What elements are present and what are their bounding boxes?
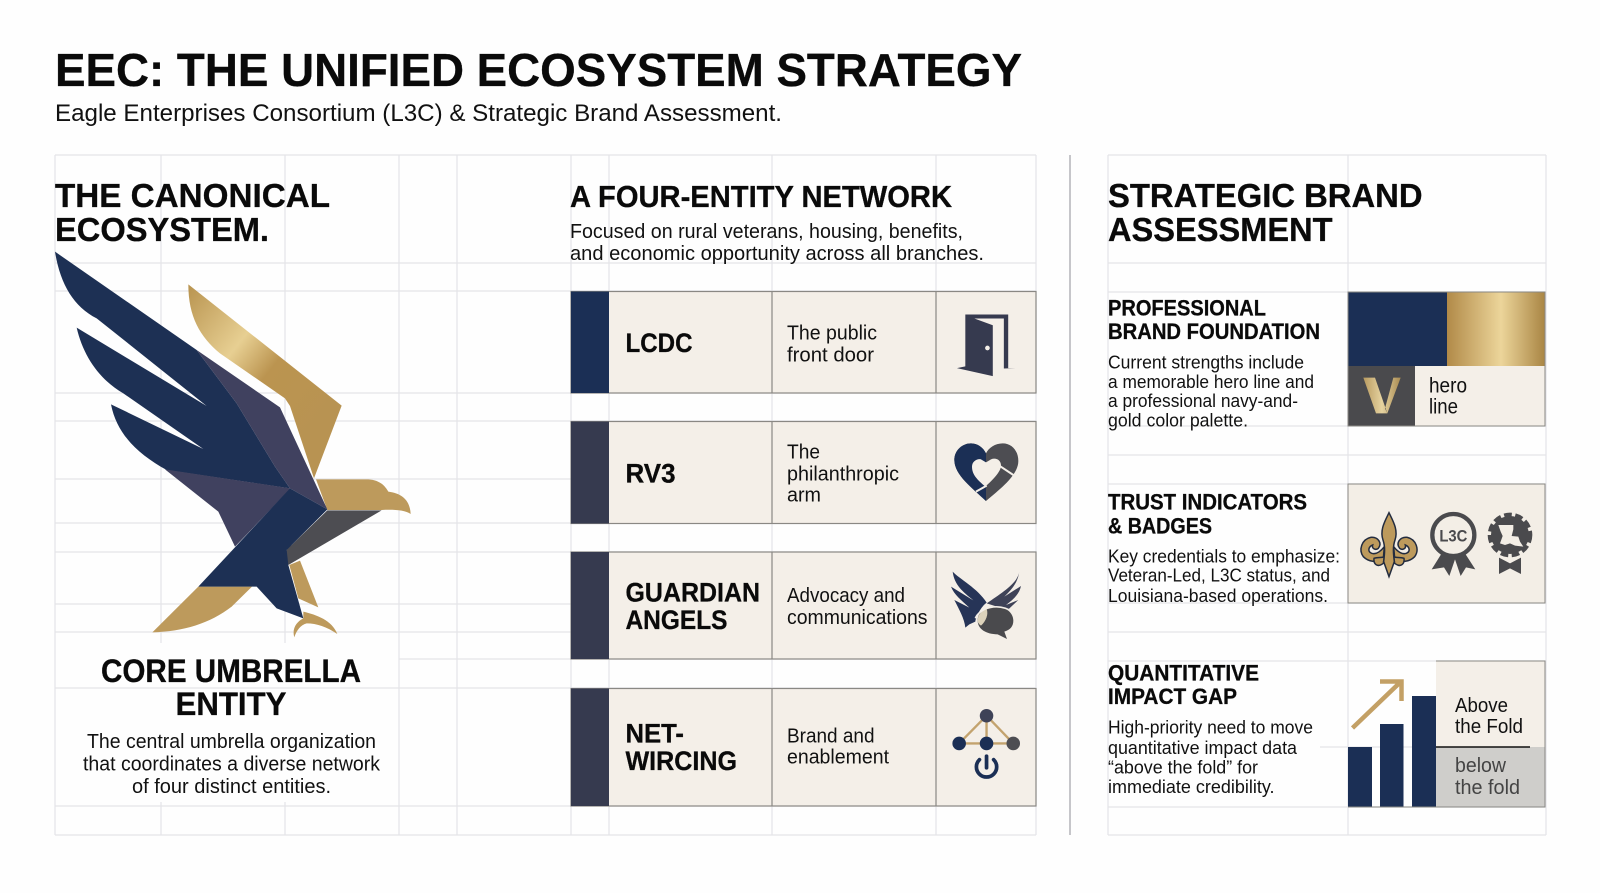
row: RV3: arm bbox=[787, 484, 821, 506]
icon: open door bbox=[957, 315, 1016, 376]
row: LCDC: LCDC bbox=[626, 328, 692, 358]
icon: fleur-de-lis bbox=[1361, 513, 1417, 577]
section: quantitative impact gap: QUANTITATIVE bbox=[1108, 661, 1259, 686]
icon: network and power bbox=[952, 709, 1020, 777]
panel: canonical ecosystem bbox=[55, 177, 411, 798]
text: core description: of four distinct entities. bbox=[132, 776, 331, 798]
section: trust indicators and badges: TRUST INDICATORS bbox=[1108, 490, 1307, 514]
icon: eagle logo bbox=[55, 252, 411, 637]
section: professional brand foundation: a professional navy-and- bbox=[1108, 391, 1298, 411]
graphic: brand palette swatches: line bbox=[1429, 396, 1458, 418]
heading: core umbrella entity bbox=[101, 653, 361, 722]
section: quantitative impact gap: High-priority need to move bbox=[1108, 718, 1313, 738]
section: trust indicators and badges bbox=[1108, 484, 1545, 606]
title bbox=[55, 44, 1022, 127]
section: professional brand foundation: Current strengths include bbox=[1108, 352, 1304, 372]
row: Net-Wircing: WIRCING bbox=[626, 746, 737, 776]
section: trust indicators and badges: Veteran-Led, L3C status, and bbox=[1108, 566, 1330, 586]
row: Net-Wircing: NET- bbox=[626, 718, 684, 748]
section: quantitative impact gap: “above the fold” for bbox=[1108, 758, 1258, 778]
heading: core umbrella entity: CORE UMBRELLA bbox=[101, 653, 361, 689]
section: trust indicators and badges: & BADGES bbox=[1108, 514, 1212, 538]
graphic: brand palette swatches bbox=[1348, 292, 1545, 426]
heading: four-entity network: A FOUR-ENTITY NETWORK bbox=[570, 179, 953, 214]
text: network description bbox=[570, 221, 984, 265]
panel: strategic brand assessment bbox=[1108, 177, 1545, 807]
callout: above and below the fold bbox=[1348, 661, 1545, 807]
text: core description: that coordinates a diverse network bbox=[83, 754, 381, 776]
row: Guardian Angels: Advocacy and bbox=[787, 585, 905, 607]
section: quantitative impact gap: quantitative impact data bbox=[1108, 738, 1298, 758]
heading: strategic brand assessment: ASSESSMENT bbox=[1108, 211, 1332, 248]
text: network description: and economic opportunity across all branches. bbox=[570, 243, 984, 265]
section: quantitative impact gap bbox=[1108, 661, 1545, 807]
section: professional brand foundation: a memorable hero line and bbox=[1108, 372, 1314, 392]
heading: the canonical ecosystem: ECOSYSTEM. bbox=[55, 211, 269, 248]
section: quantitative impact gap: IMPACT GAP bbox=[1108, 684, 1237, 709]
graphic: badges box bbox=[1348, 484, 1545, 603]
icon: wings and speech bubble bbox=[951, 572, 1021, 639]
heading: strategic brand assessment bbox=[1108, 177, 1422, 248]
icon: heart bbox=[954, 443, 1018, 501]
row: Guardian Angels: communications bbox=[787, 607, 928, 629]
text: network description: Focused on rural veterans, housing, benefits, bbox=[570, 221, 963, 243]
heading: the canonical ecosystem: THE CANONICAL bbox=[55, 177, 330, 214]
callout: above and below the fold: the fold bbox=[1455, 776, 1520, 799]
icon: L3C ribbon bbox=[1432, 514, 1475, 576]
row: Net-Wircing: Brand and bbox=[787, 726, 874, 748]
callout: above and below the fold: Above bbox=[1455, 694, 1508, 717]
section: professional brand foundation: BRAND FOUNDATION bbox=[1108, 319, 1320, 344]
section: trust indicators and badges: Louisiana-based operations. bbox=[1108, 586, 1328, 606]
heading: core umbrella entity: ENTITY bbox=[176, 686, 286, 722]
graphic: brand palette swatches: hero bbox=[1429, 374, 1467, 398]
icon: L3C ribbon: L3C bbox=[1439, 526, 1467, 545]
row: RV3 bbox=[571, 422, 1036, 524]
callout: above and below the fold: the Fold bbox=[1455, 715, 1523, 738]
heading: strategic brand assessment: STRATEGIC BRAND bbox=[1108, 177, 1422, 214]
row: RV3: RV3 bbox=[626, 458, 676, 488]
heading: the canonical ecosystem bbox=[55, 177, 330, 248]
subtitle: Eagle Enterprises Consortium (L3C) & Strategic Brand Assessment. bbox=[55, 100, 782, 127]
row: Net-Wircing: enablement bbox=[787, 746, 889, 768]
row: LCDC bbox=[571, 292, 1036, 393]
chart: rising bars with arrow bbox=[1348, 682, 1436, 807]
section: trust indicators and badges: Key credentials to emphasize: bbox=[1108, 546, 1340, 566]
section: professional brand foundation: PROFESSIONAL bbox=[1108, 296, 1266, 320]
section: professional brand foundation bbox=[1108, 292, 1545, 430]
row: Guardian Angels bbox=[571, 552, 1036, 659]
arrow: upward trend bbox=[1352, 682, 1402, 728]
callout: above and below the fold: below bbox=[1455, 754, 1506, 777]
row: Guardian Angels: GUARDIAN bbox=[626, 578, 760, 608]
row: LCDC: The public bbox=[787, 322, 877, 344]
icon: Louisiana seal bbox=[1491, 516, 1529, 574]
row: Net-Wircing bbox=[571, 688, 1036, 806]
panel: four-entity network bbox=[570, 179, 1036, 806]
title: EEC: THE UNIFIED ECOSYSTEM STRATEGY bbox=[55, 44, 1022, 96]
row: Guardian Angels: ANGELS bbox=[626, 605, 728, 635]
section: quantitative impact gap: immediate credibility. bbox=[1108, 777, 1274, 797]
section: professional brand foundation: gold color palette. bbox=[1108, 410, 1248, 430]
text: core description bbox=[83, 731, 381, 798]
row: LCDC: front door bbox=[787, 344, 874, 366]
text: core description: The central umbrella organization bbox=[87, 731, 376, 753]
row: RV3: The bbox=[787, 442, 820, 464]
row: RV3: philanthropic bbox=[787, 464, 899, 486]
